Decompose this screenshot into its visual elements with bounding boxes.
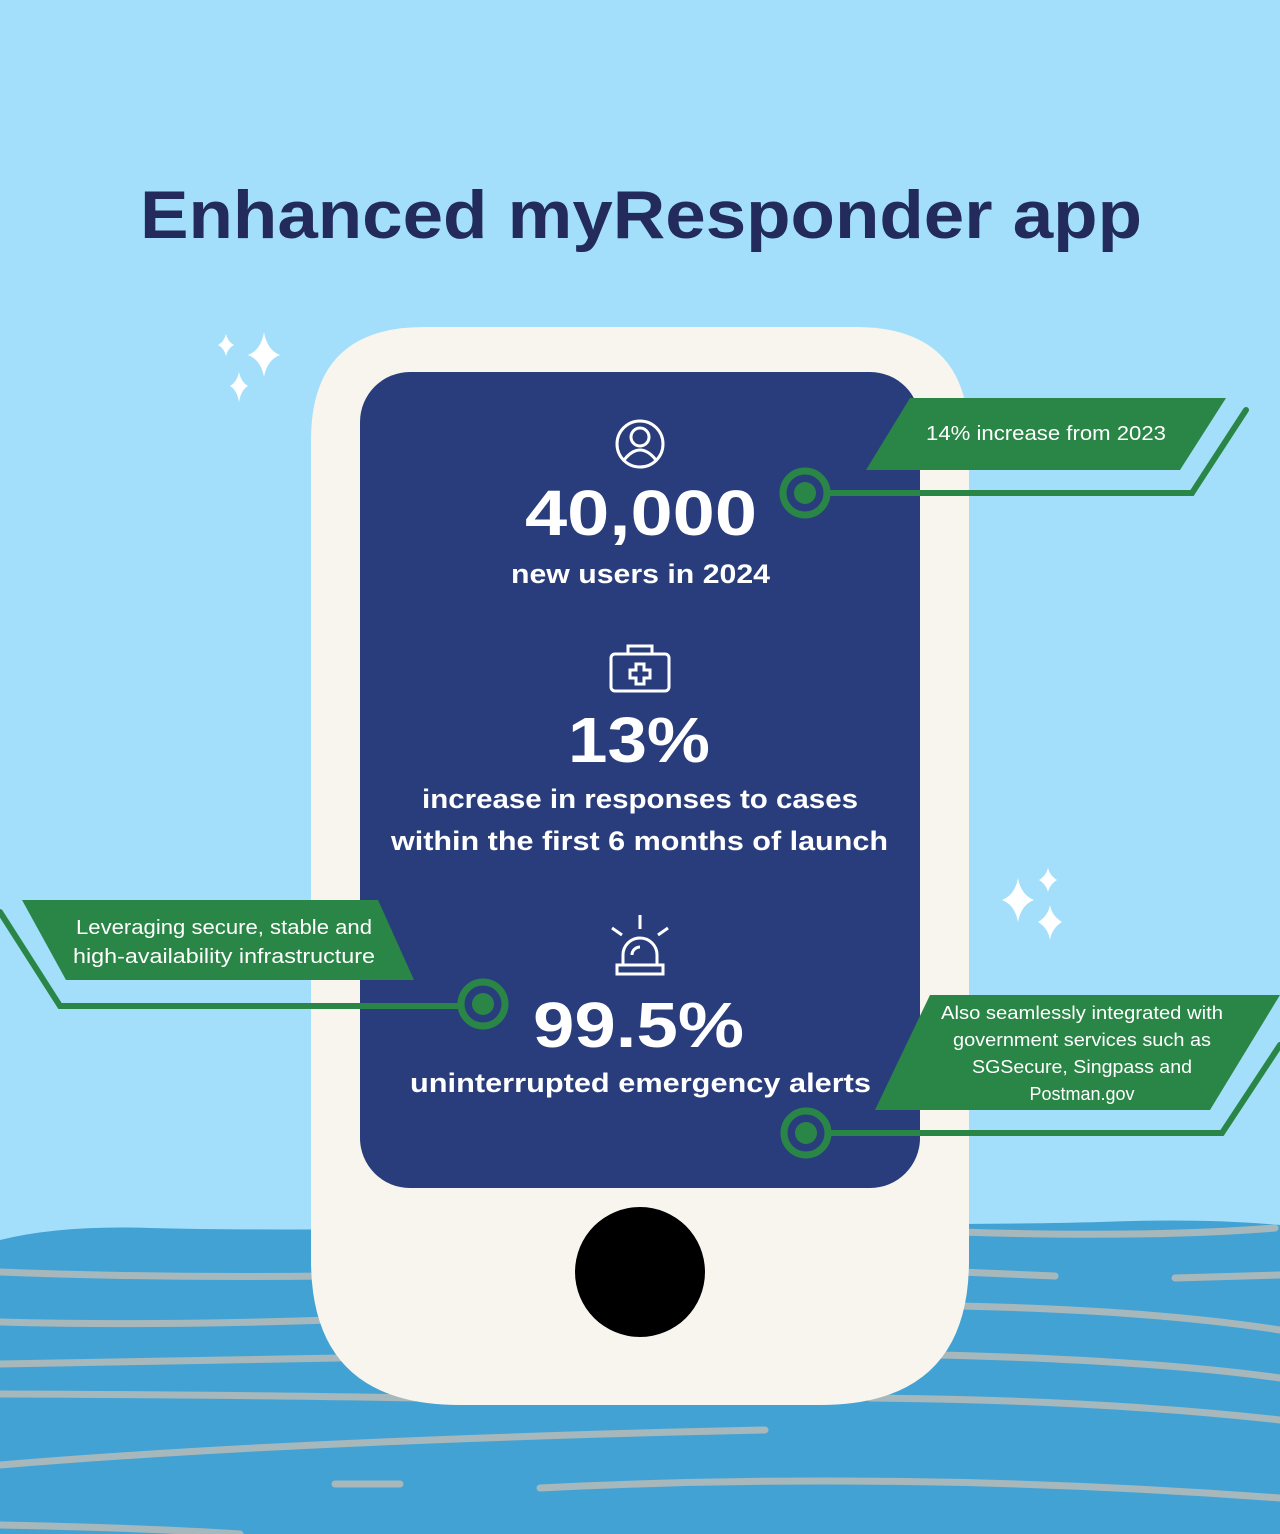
callout: integrated services: SGSecure, Singpass and <box>972 1057 1192 1077</box>
stat: 40,000 <box>511 477 770 589</box>
stat: 99.5%: 99.5% <box>533 989 744 1061</box>
callout: 14% increase: 14% increase from 2023 <box>926 423 1166 445</box>
stat: 13% <box>390 704 888 856</box>
phone body <box>311 327 969 1405</box>
sparkles right <box>1002 868 1062 940</box>
callout: infrastructure: high-availability infrastructure <box>73 946 375 968</box>
stat: 40,000: 40,000 <box>525 477 757 549</box>
callout: integrated services <box>784 995 1280 1155</box>
callout: integrated services: Also seamlessly integrated with <box>941 1003 1223 1023</box>
sparkles top left <box>218 332 280 402</box>
phone screen <box>360 372 920 1188</box>
title: Enhanced myResponder app <box>140 177 1142 253</box>
icon: siren <box>612 915 668 974</box>
callout: 14% increase <box>783 398 1246 515</box>
stat: 13%: increase in responses to cases <box>422 784 858 814</box>
stat: 40,000: new users in 2024 <box>511 559 770 589</box>
stat: 13%: within the first 6 months of launch <box>390 826 888 856</box>
stat: 13%: 13% <box>568 704 710 776</box>
callout: infrastructure: Leveraging secure, stable and <box>76 917 372 939</box>
callout: integrated services: government services such as <box>953 1030 1211 1050</box>
water <box>0 1221 1280 1534</box>
icon: user <box>617 421 663 467</box>
stat: 99.5%: uninterrupted emergency alerts <box>410 1068 871 1098</box>
stat: 99.5% <box>410 989 871 1098</box>
callout: infrastructure <box>0 900 505 1026</box>
icon: medical kit <box>611 646 669 691</box>
callout: integrated services: Postman.gov <box>1029 1084 1135 1104</box>
home button <box>575 1207 705 1337</box>
